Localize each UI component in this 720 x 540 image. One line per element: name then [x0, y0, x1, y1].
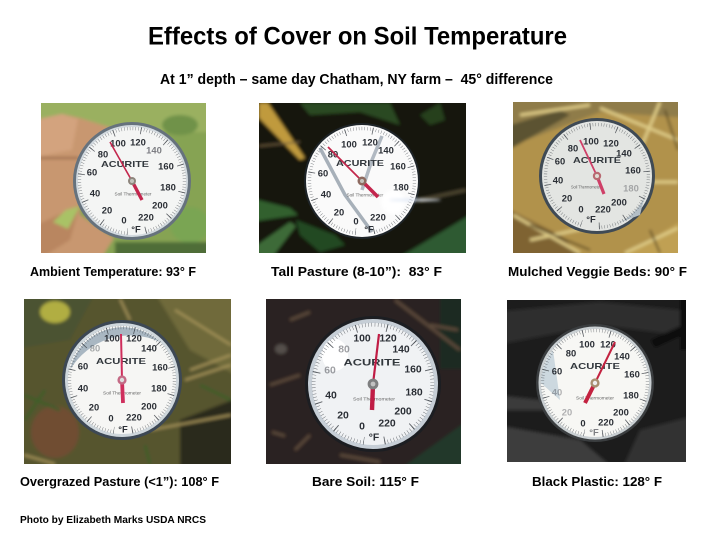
thermometer dial: 200	[394, 406, 412, 418]
thermometer dial	[73, 122, 191, 240]
thermometer dial: 140	[141, 342, 157, 354]
thermometer dial: 100	[341, 138, 357, 150]
thermometer dial	[305, 316, 441, 452]
thermometer dial	[304, 123, 420, 239]
thermometer dial: °F	[586, 214, 596, 224]
thermometer dial: 180	[160, 182, 176, 192]
thermometer dial: 60	[78, 360, 88, 372]
thermometer dial: 80	[338, 344, 350, 356]
thermometer dial: 120	[126, 332, 142, 344]
thermometer dial: 140	[614, 350, 630, 362]
sun glare	[381, 190, 441, 214]
thermometer dial: 200	[141, 400, 157, 412]
thermometer dial: 180	[623, 182, 639, 194]
thermometer dial: 80	[566, 348, 576, 358]
panel: bare soil photo	[266, 299, 461, 464]
thermometer dial: ACURITE	[336, 158, 384, 168]
thermometer dial: ACURITE	[96, 356, 146, 366]
caption: bare soil: Bare Soil: 115° F	[312, 474, 419, 489]
photo background: sparse grass	[24, 299, 231, 464]
panel: tall pasture photo	[259, 103, 466, 253]
thermometer dial: 0	[353, 216, 359, 226]
thermometer dial: 0	[580, 418, 586, 428]
thermometer dial: 20	[562, 406, 572, 418]
photo background: black plastic folds	[507, 300, 686, 462]
thermometer dial: 20	[337, 410, 349, 422]
thermometer dial: 100	[104, 332, 120, 344]
thermometer dial: °F	[369, 432, 379, 444]
photo background: grass and hand	[41, 103, 206, 253]
thermometer dial: Soil Thermometer	[103, 390, 141, 396]
thermometer dial: ACURITE	[573, 155, 621, 165]
thermometer dial: 220	[595, 204, 611, 214]
thermometer dial: 100	[583, 136, 599, 146]
thermometer dial: 40	[321, 188, 331, 200]
thermometer dial: 220	[138, 212, 154, 222]
thermometer dial: 20	[102, 204, 112, 216]
thermometer dial: 200	[152, 200, 168, 210]
thermometer dial: 160	[625, 164, 641, 176]
thermometer dial: 200	[611, 196, 627, 208]
thermometer dial: 140	[616, 148, 632, 158]
thermometer dial: 0	[578, 204, 584, 214]
thermometer dial: ACURITE	[570, 361, 620, 371]
caption: overgrazed pasture: Overgrazed Pasture (<1”): 108° F	[20, 474, 219, 489]
thermometer dial: °F	[118, 424, 128, 434]
photo background: dark foliage	[259, 103, 466, 253]
thermometer dial: 220	[126, 412, 142, 422]
thermometer dial: 180	[405, 388, 423, 398]
thermometer dial: 40	[325, 390, 337, 402]
thermometer dial: 20	[89, 402, 99, 412]
panel: mulched veggie beds photo	[513, 102, 678, 253]
thermometer dial	[539, 118, 655, 234]
thermometer dial: 20	[334, 206, 344, 218]
thermometer dial: Soil Thermometer	[571, 184, 601, 190]
thermometer dial: 220	[370, 212, 386, 222]
caption: tall pasture: Tall Pasture (8-10”): 83° F	[271, 264, 442, 279]
thermometer dial: 180	[151, 382, 167, 394]
thermometer dial: 100	[579, 338, 595, 350]
title: Effects of Cover on Soil Temperature	[148, 22, 567, 50]
thermometer dial: Soil Thermometer	[576, 396, 614, 402]
thermometer dial: 100	[110, 138, 126, 148]
thermometer dial: 120	[603, 138, 619, 148]
thermometer dial: °F	[364, 224, 374, 234]
thermometer dial: 120	[130, 136, 146, 148]
thermometer dial: 120	[600, 338, 616, 350]
photo background: straw mulch	[513, 102, 678, 253]
thermometer dial: 60	[318, 168, 328, 178]
thermometer dial: 220	[378, 418, 396, 430]
thermometer dial: ACURITE	[101, 159, 149, 169]
thermometer dial: 80	[568, 142, 578, 154]
thermometer dial: °F	[589, 426, 599, 438]
thermometer dial: 100	[353, 334, 371, 344]
thermometer dial: 0	[359, 422, 365, 432]
thermometer dial: 40	[552, 386, 562, 398]
thermometer dial: 160	[152, 362, 168, 372]
thermometer dial: Soil Thermometer	[353, 396, 395, 402]
thermometer dial: 200	[613, 406, 629, 418]
thermometer dial: 140	[378, 144, 394, 156]
thermometer dial: 160	[158, 160, 174, 172]
thermometer dial: 80	[98, 148, 108, 160]
thermometer dial: 120	[379, 334, 397, 344]
subtitle: At 1” depth – same day Chatham, NY farm – 45° difference	[160, 72, 553, 88]
thermometer dial: 220	[598, 416, 614, 428]
thermometer dial: 180	[623, 390, 639, 400]
panel: overgrazed pasture photo	[24, 299, 231, 464]
thermometer dial: 0	[121, 214, 127, 226]
thermometer dial	[62, 320, 182, 440]
thermometer dial: 60	[555, 156, 565, 166]
thermometer dial: 40	[90, 188, 100, 198]
thermometer dial: 80	[328, 148, 338, 160]
thermometer dial: 40	[78, 382, 88, 394]
thermometer dial: 60	[87, 166, 97, 178]
thermometer dial: 180	[393, 182, 409, 192]
thermometer dial	[536, 324, 654, 442]
thermometer dial: 40	[553, 174, 563, 186]
thermometer dial: 60	[324, 366, 336, 376]
thermometer dial: 160	[390, 160, 406, 172]
thermometer dial: 140	[392, 344, 410, 356]
photo credit: Photo by Elizabeth Marks USDA NRCS	[20, 514, 206, 526]
photo background: dark mulch soil	[266, 299, 461, 464]
thermometer dial: °F	[131, 224, 141, 234]
thermometer dial: 140	[146, 144, 162, 156]
caption: black plastic: Black Plastic: 128° F	[532, 474, 662, 489]
caption: ambient temperature: Ambient Temperature: 93° F	[30, 264, 196, 279]
thermometer dial: 0	[108, 412, 114, 424]
thermometer dial: 60	[552, 366, 562, 376]
panel: black plastic photo	[507, 300, 686, 462]
thermometer dial: Soil Thermometer	[114, 192, 152, 198]
thermometer dial: 20	[562, 192, 572, 204]
thermometer dial: 80	[90, 342, 100, 354]
thermometer dial: 120	[362, 136, 378, 148]
thermometer dial: 160	[624, 368, 640, 380]
thermometer dial: ACURITE	[344, 358, 400, 368]
thermometer dial: 160	[404, 364, 422, 376]
caption: mulched veggie beds: Mulched Veggie Beds: 90° F	[508, 264, 687, 279]
panel: ambient temperature photo	[41, 103, 206, 253]
thermometer dial: Soil Thermometer	[346, 192, 384, 198]
thermometer dial: 200	[385, 200, 401, 210]
